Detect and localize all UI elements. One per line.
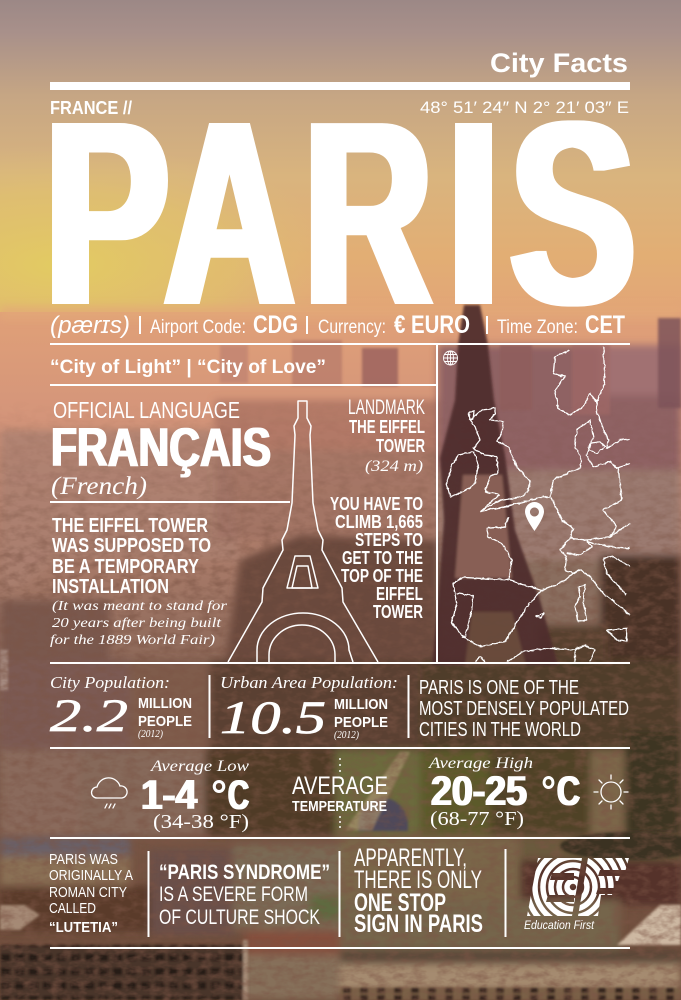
text block: steps to the top: YOU HAVE TO: [330, 494, 423, 514]
stat: average low: C: [228, 771, 249, 818]
text block: landmark: (324 m): [365, 458, 423, 475]
stat: average low: (34-38 °F): [153, 811, 249, 833]
stat: average low: 1-4: [141, 771, 198, 818]
text block: temporary installation: [50, 515, 228, 648]
title: PARIS: A: [164, 65, 295, 360]
logo: EF Education First: [524, 858, 629, 929]
icon: map pin on Paris: [525, 502, 544, 531]
text block: temporary installation: 20 years after being built: [52, 616, 222, 631]
facts row: pronunciation, airport code, currency, time zone: (pærɪs): [50, 312, 130, 339]
icon: cloud with rain: [92, 778, 127, 808]
text block: steps to the top: STEPS TO: [355, 530, 423, 550]
facts row: pronunciation, airport code, currency, time zone: Time Zone:: [497, 317, 578, 338]
background: real Eiffel Tower silhouette: [432, 305, 558, 665]
stat: urban area population: MILLION: [334, 696, 388, 713]
stat: average high: Average High: [428, 755, 533, 772]
fact: Lutetia: CALLED: [49, 900, 96, 917]
text block: steps to the top: [330, 494, 423, 622]
text block: steps to the top: CLIMB 1,665: [335, 512, 423, 532]
panel: official language: [51, 397, 271, 500]
coordinates: 48° 51′ 24″ N 2° 21′ 03″ E: [420, 98, 629, 117]
facts row: pronunciation, airport code, currency, time zone: Currency:: [318, 317, 386, 338]
fact: Paris syndrome: “PARIS SYNDROME”: [159, 861, 330, 884]
heavy top rule: [50, 82, 630, 90]
fact: Paris syndrome: IS A SEVERE FORM: [159, 883, 308, 906]
fact: one stop sign: SIGN IN PARIS: [354, 910, 483, 938]
text block: density: CITIES IN THE WORLD: [419, 719, 581, 741]
text block: temporary installation: WAS SUPPOSED TO: [52, 535, 211, 557]
fact: one stop sign: APPARENTLY,: [354, 844, 467, 872]
stat: average high: C: [557, 767, 580, 814]
stat: average high: [428, 755, 580, 830]
fact: Paris syndrome: [159, 861, 330, 929]
fact: one stop sign: ONE STOP: [354, 889, 446, 917]
label: average temperature: [292, 758, 388, 828]
stat: urban area population: [220, 673, 398, 744]
icon: Eiffel Tower outline: [228, 401, 378, 662]
stat: city population: MILLION: [138, 695, 192, 712]
text block: steps to the top: TOWER: [373, 602, 423, 622]
facts row: pronunciation, airport code, currency, time zone: [50, 311, 625, 339]
facts row: pronunciation, airport code, currency, time zone: CET: [585, 311, 625, 339]
fact: one stop sign: [354, 844, 483, 938]
facts row: pronunciation, airport code, currency, time zone: Airport Code:: [150, 317, 246, 338]
stat: average high: 20-25: [431, 767, 527, 814]
panel: official language: FRANÇAIS: [51, 416, 271, 478]
map of western Europe: [447, 347, 630, 662]
title: PARIS: R: [304, 66, 432, 360]
text block: temporary installation: BE A TEMPORARY: [52, 556, 200, 578]
fact: Paris syndrome: OF CULTURE SHOCK: [159, 906, 320, 929]
text block: temporary installation: (It was meant to stand for: [52, 599, 228, 614]
stat: urban area population: Urban Area Population:: [220, 673, 398, 692]
label: average temperature: AVERAGE: [292, 772, 388, 800]
facts row: pronunciation, airport code, currency, time zone: CDG: [253, 311, 298, 339]
label: average temperature: TEMPERATURE: [292, 798, 387, 815]
stat: average high: (68-77 °F): [430, 808, 524, 830]
fact: Lutetia: ROMAN CITY: [49, 884, 127, 901]
logo: EF Education First: Education First: [524, 918, 595, 932]
text block: landmark: TOWER: [376, 436, 425, 456]
nicknames: “City of Light” | “City of Love”: [50, 357, 326, 378]
fact: Lutetia: PARIS WAS: [49, 851, 118, 868]
title: PARIS: [44, 65, 636, 360]
text block: landmark: LANDMARK: [348, 396, 425, 419]
fact: Lutetia: “LUTETIA”: [49, 919, 118, 936]
stat: average low: Average Low: [150, 758, 249, 775]
stat: urban area population: (2012): [334, 730, 360, 741]
stat: average low: °: [211, 771, 227, 818]
fact: Lutetia: [49, 851, 133, 936]
text block: steps to the top: TOP OF THE: [341, 566, 423, 586]
text block: temporary installation: INSTALLATION: [52, 576, 169, 598]
label: France: FRANCE //: [50, 98, 132, 118]
stat: urban area population: 10.5: [220, 692, 326, 744]
stat: city population: [50, 673, 192, 742]
text block: landmark: [348, 396, 425, 475]
text block: density: PARIS IS ONE OF THE: [419, 677, 579, 699]
icon: globe: [444, 351, 458, 365]
stat: urban area population: PEOPLE: [334, 714, 388, 731]
title: PARIS: P: [44, 67, 169, 360]
text block: steps to the top: EIFFEL: [376, 584, 423, 604]
text block: density: [419, 677, 629, 741]
heading: City Facts: City Facts: [490, 48, 628, 78]
fact: Lutetia: ORIGINALLY A: [49, 867, 133, 884]
text block: steps to the top: GET TO THE: [342, 548, 423, 568]
icon: sun: [594, 775, 628, 809]
stat: city population: PEOPLE: [138, 713, 192, 730]
title: PARIS: I: [448, 67, 500, 360]
stat: city population: City Population:: [50, 673, 170, 692]
text block: landmark: THE EIFFEL: [349, 417, 425, 437]
stat: city population: 2.2: [50, 690, 128, 742]
stat: average high: °: [541, 767, 556, 814]
panel: official language: OFFICIAL LANGUAGE: [53, 397, 240, 423]
text block: temporary installation: THE EIFFEL TOWER: [52, 515, 208, 537]
stat: city population: (2012): [138, 729, 164, 740]
panel: official language: (French): [51, 473, 147, 500]
text block: temporary installation: for the 1889 World Fair): [50, 633, 215, 648]
title: PARIS: S: [510, 66, 636, 360]
stat: average low: [141, 758, 249, 833]
facts row: pronunciation, airport code, currency, time zone: € EURO: [394, 311, 470, 339]
fact: one stop sign: THERE IS ONLY: [354, 866, 482, 894]
